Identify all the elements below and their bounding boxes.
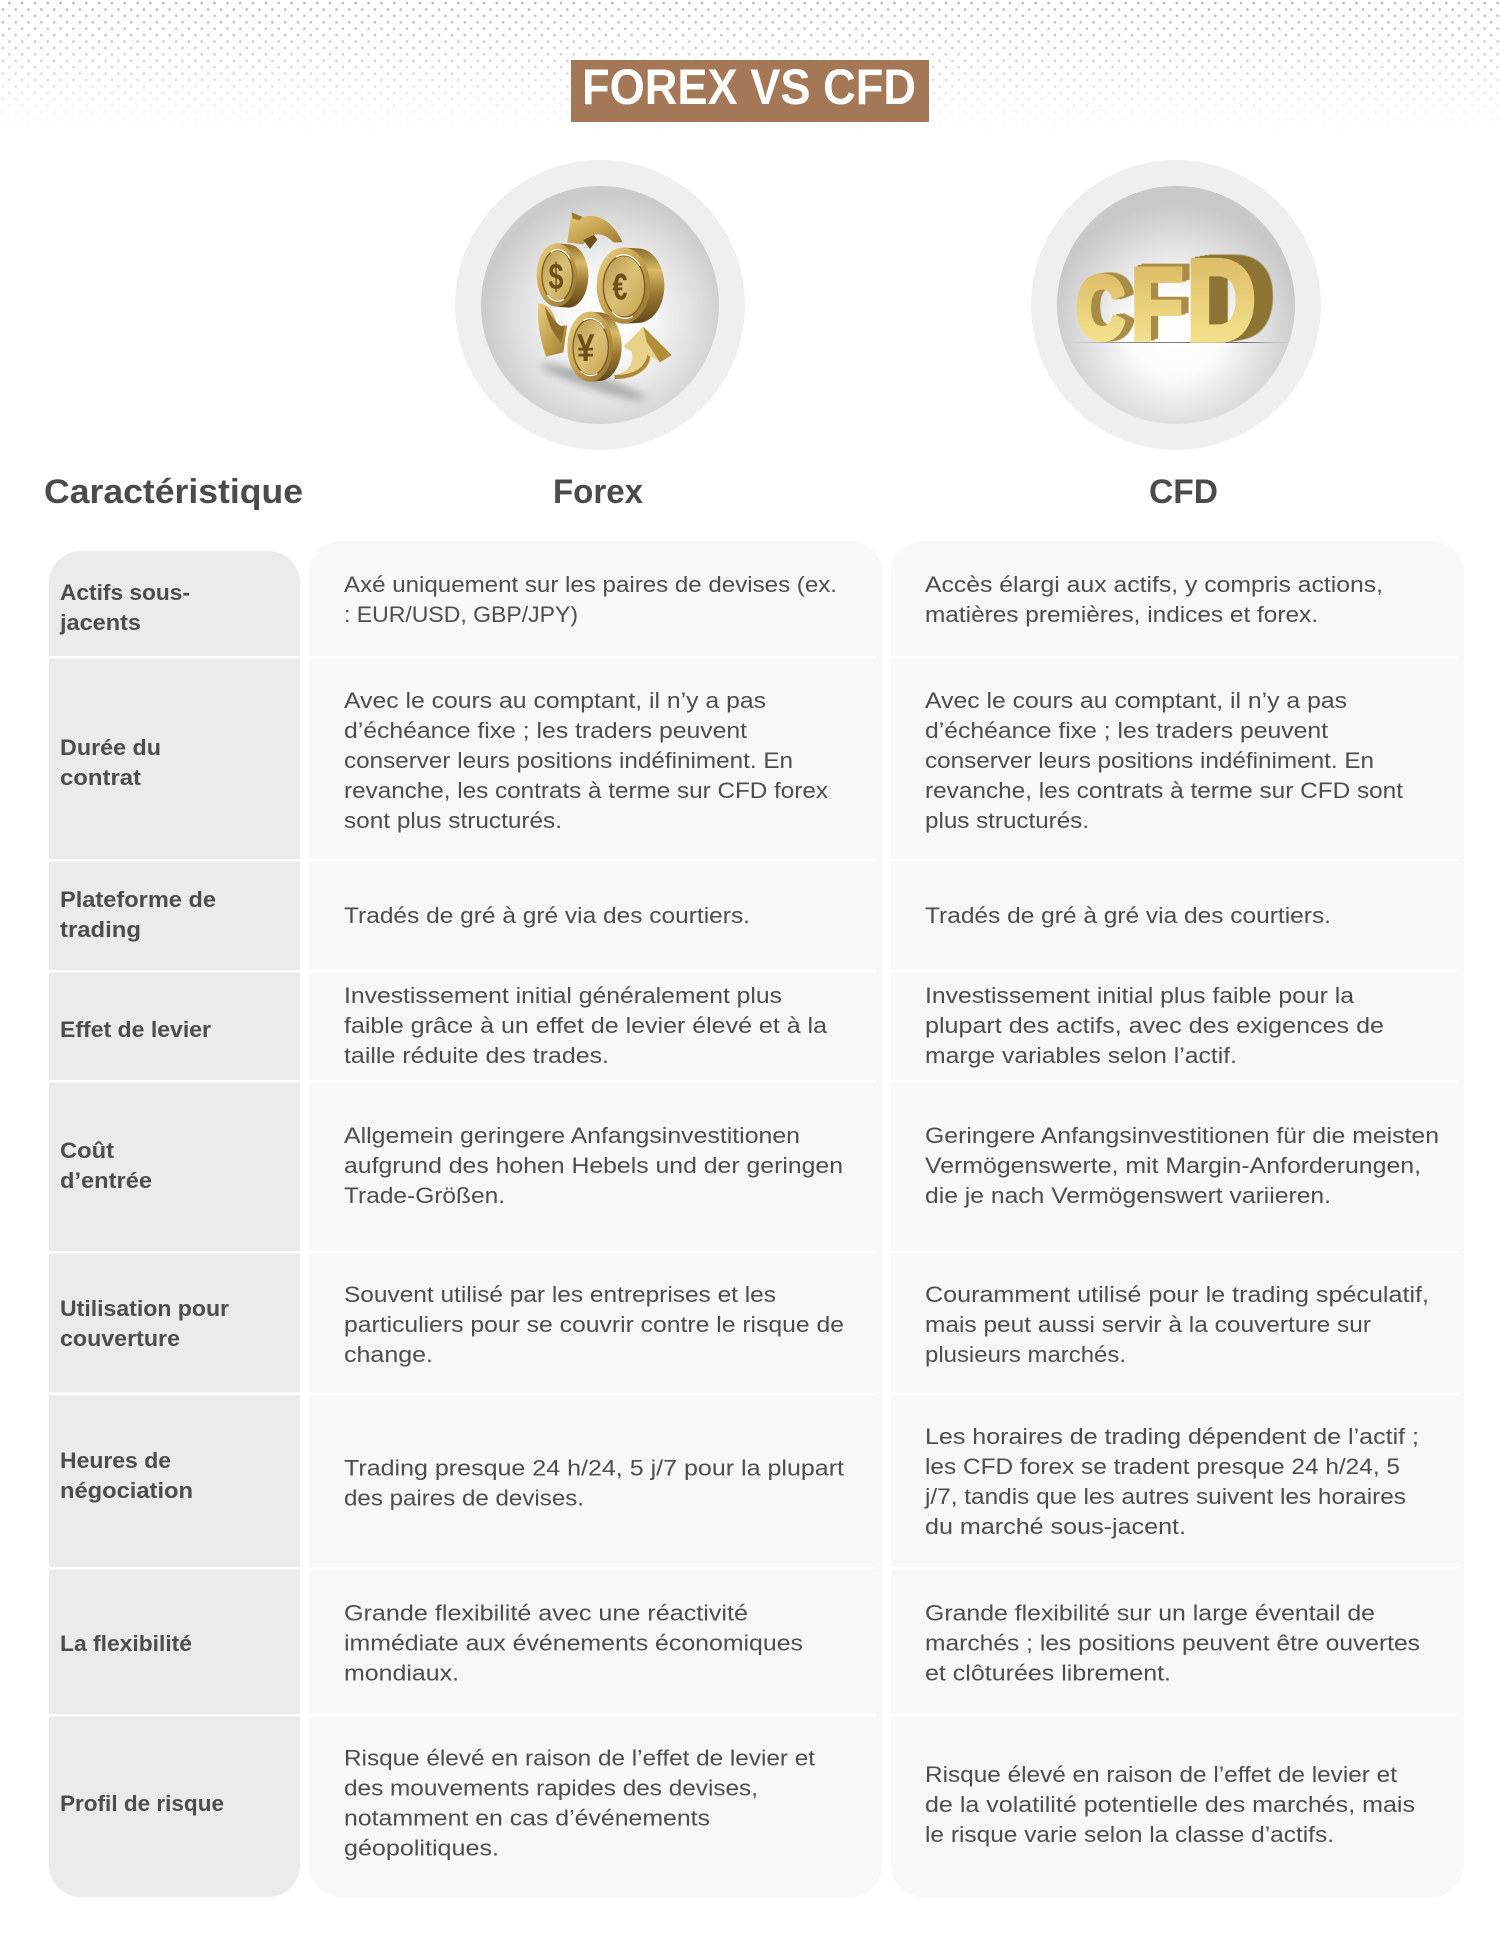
text block: CFD heures: du marché sous-jacent. [925,1514,1186,1539]
label: Effet de levier: Effet de levier [60,1017,211,1042]
text block: CFD levier: marge variables selon l’actif. [925,1043,1237,1068]
label: Durée du contrat: contrat [60,765,142,790]
icon: forex coins medallion: ¥ [577,327,595,370]
text block: Forex coût: aufgrund des hohen Hebels und der geringen [344,1153,843,1178]
text block: CFD risque: Risque élevé en raison de l’effet de levier et [925,1762,1398,1787]
text block: Forex risque: notamment en cas d’événements [344,1806,710,1830]
text block: Forex flexibilité: Grande flexibilité avec une réactivité [344,1600,748,1626]
text block: Forex risque [344,1746,816,1860]
icon: CFD gold letters medallion: F [1131,249,1183,362]
text block: CFD heures [924,1424,1419,1539]
icon: CFD gold letters medallion: C [1076,258,1125,357]
title: FOREX VS CFD [582,59,916,115]
text block: Forex coût: Allgemein geringere Anfangsinvestitionen [344,1123,800,1148]
text block: Forex actifs: Axé uniquement sur les paires de devises (ex. [344,572,837,597]
label: Utilisation pour couverture: couverture [60,1326,180,1351]
text block: CFD durée: plus structurés. [925,808,1089,833]
text block: CFD durée: conserver leurs positions indéfiniment. En [925,748,1374,773]
text block: CFD couverture: plusieurs marchés. [925,1342,1126,1367]
text block: CFD heures: Les horaires de trading dépendent de l’actif ; [925,1424,1419,1449]
icon: forex coins medallion: € [613,266,627,307]
text block: Forex couverture: change. [344,1342,433,1367]
text block: Forex couverture [344,1282,844,1367]
text block: Forex heures: des paires de devises. [344,1486,584,1510]
label: Coût d'entrée [60,1138,152,1193]
heading: CFD: CFD [1149,473,1218,511]
text block: Forex risque: Risque élevé en raison de l’effet de levier et [344,1746,816,1770]
label: La flexibilité: La flexibilité [60,1631,192,1656]
label: Heures de négociation: négociation [60,1478,193,1503]
text block: CFD heures: les CFD forex se tradent presque 24 h/24, 5 [925,1454,1400,1479]
text block: CFD durée: revanche, les contrats à terme sur CFD sont [925,778,1404,803]
text block: Forex couverture: Souvent utilisé par les entreprises et les [344,1282,776,1307]
label: Durée du contrat: Durée du [60,735,161,760]
text block: CFD couverture: Couramment utilisé pour le trading spéculatif, [925,1282,1429,1307]
text block: CFD flexibilité: et clôturées librement. [925,1660,1171,1686]
text block: CFD durée [925,688,1404,833]
text block: CFD plateforme: Tradés de gré à gré via des courtiers. [925,903,1331,928]
heading: Caractéristique: Caractéristique [44,473,303,511]
text block: CFD levier: plupart des actifs, avec des exigences de [925,1013,1384,1038]
text block: Forex flexibilité: immédiate aux événements économiques [344,1630,803,1656]
heading: Forex: Forex [553,473,643,511]
text block: CFD coût: Geringere Anfangsinvestitionen für die meisten [925,1123,1439,1148]
label: Coût d'entrée: Coût [60,1138,115,1163]
text block: CFD risque: de la volatilité potentielle des marchés, mais [925,1792,1415,1817]
label: Durée du contrat [60,735,161,790]
text block: CFD risque: le risque varie selon la classe d’actifs. [925,1822,1334,1847]
text block: Forex durée: conserver leurs positions indéfiniment. En [344,748,793,773]
text block: Forex levier: faible grâce à un effet de levier élevé et à la [344,1013,828,1038]
text block: Forex durée: sont plus structurés. [344,808,562,833]
text block: Forex couverture: particuliers pour se couvrir contre le risque de [344,1312,844,1337]
text block: Forex levier: taille réduite des trades. [344,1043,609,1068]
text block: CFD couverture: mais peut aussi servir à la couverture sur [925,1312,1372,1337]
text block: Forex heures: Trading presque 24 h/24, 5 j/7 pour la plupart [344,1456,845,1480]
label: Actifs sous-jacents [59,580,190,635]
label: Profil de risque: Profil de risque [60,1791,224,1816]
icon: CFD gold letters medallion [1031,160,1321,450]
text block: Forex durée: d’échéance fixe ; les traders peuvent [344,718,748,743]
label: Heures de négociation [60,1448,193,1503]
label: Actifs sous-jacents: jacents [59,610,141,635]
background dot pattern [2,2,1499,120]
text block: Forex actifs [344,572,837,627]
text block: CFD couverture [925,1282,1429,1367]
text block: Forex plateforme: Tradés de gré à gré via des courtiers. [344,903,750,928]
text block: CFD durée: d’échéance fixe ; les traders peuvent [925,718,1329,743]
text block: CFD flexibilité: Grande flexibilité sur un large éventail de [925,1600,1375,1626]
text block: CFD actifs [925,572,1383,627]
text block: Forex levier [344,983,828,1068]
text block: Forex durée: revanche, les contrats à terme sur CFD forex [344,778,829,803]
text block: Forex coût: Trade-Größen. [344,1183,505,1208]
text block: Forex heures [344,1456,845,1510]
panel: CFD column [891,541,1464,1897]
label: Utilisation pour couverture [60,1296,229,1351]
icon: CFD gold letters medallion: D [1187,237,1256,365]
icon: forex coins medallion: $ [549,256,563,297]
panel: Forex column [309,541,882,1897]
text block: CFD heures: j/7, tandis que les autres suivent les horaires [924,1484,1406,1509]
text block: Forex flexibilité: mondiaux. [344,1660,459,1686]
text block: CFD flexibilité [925,1600,1420,1686]
text block: CFD levier: Investissement initial plus faible pour la [925,983,1355,1008]
label: Plateforme de trading: trading [60,917,141,942]
text block: CFD coût [925,1123,1439,1208]
text block: Forex levier: Investissement initial généralement plus [344,983,782,1008]
text block: Forex coût [344,1123,843,1208]
text block: Forex actifs: : EUR/USD, GBP/JPY) [344,602,578,627]
text block: CFD coût: die je nach Vermögenswert variieren. [925,1183,1331,1208]
text block: CFD durée: Avec le cours au comptant, il n’y a pas [925,688,1347,713]
text block: CFD actifs: matières premières, indices et forex. [925,602,1318,627]
text block: CFD risque [925,1762,1415,1847]
text block: CFD levier [925,983,1384,1068]
text block: Forex flexibilité [344,1600,803,1686]
panel: caractéristiques column [49,551,300,1897]
text block: CFD actifs: Accès élargi aux actifs, y compris actions, [925,572,1383,597]
icon: forex coins medallion [455,160,745,450]
text block: Forex durée [344,688,829,833]
label: Utilisation pour couverture: Utilisation pour [60,1296,229,1321]
text block: CFD flexibilité: marchés ; les positions peuvent être ouvertes [925,1630,1420,1656]
label: Plateforme de trading [60,887,216,942]
label: Actifs sous-jacents: Actifs sous- [60,580,190,605]
label: Coût d'entrée: d’entrée [60,1168,152,1193]
text block: CFD coût: Vermögenswerte, mit Margin-Anforderungen, [925,1153,1421,1178]
label: Heures de négociation: Heures de [60,1448,171,1473]
text block: Forex risque: géopolitiques. [344,1836,499,1860]
text block: Forex durée: Avec le cours au comptant, il n’y a pas [344,688,766,713]
label: Plateforme de trading: Plateforme de [60,887,216,912]
text block: Forex risque: des mouvements rapides des devises, [344,1776,758,1800]
